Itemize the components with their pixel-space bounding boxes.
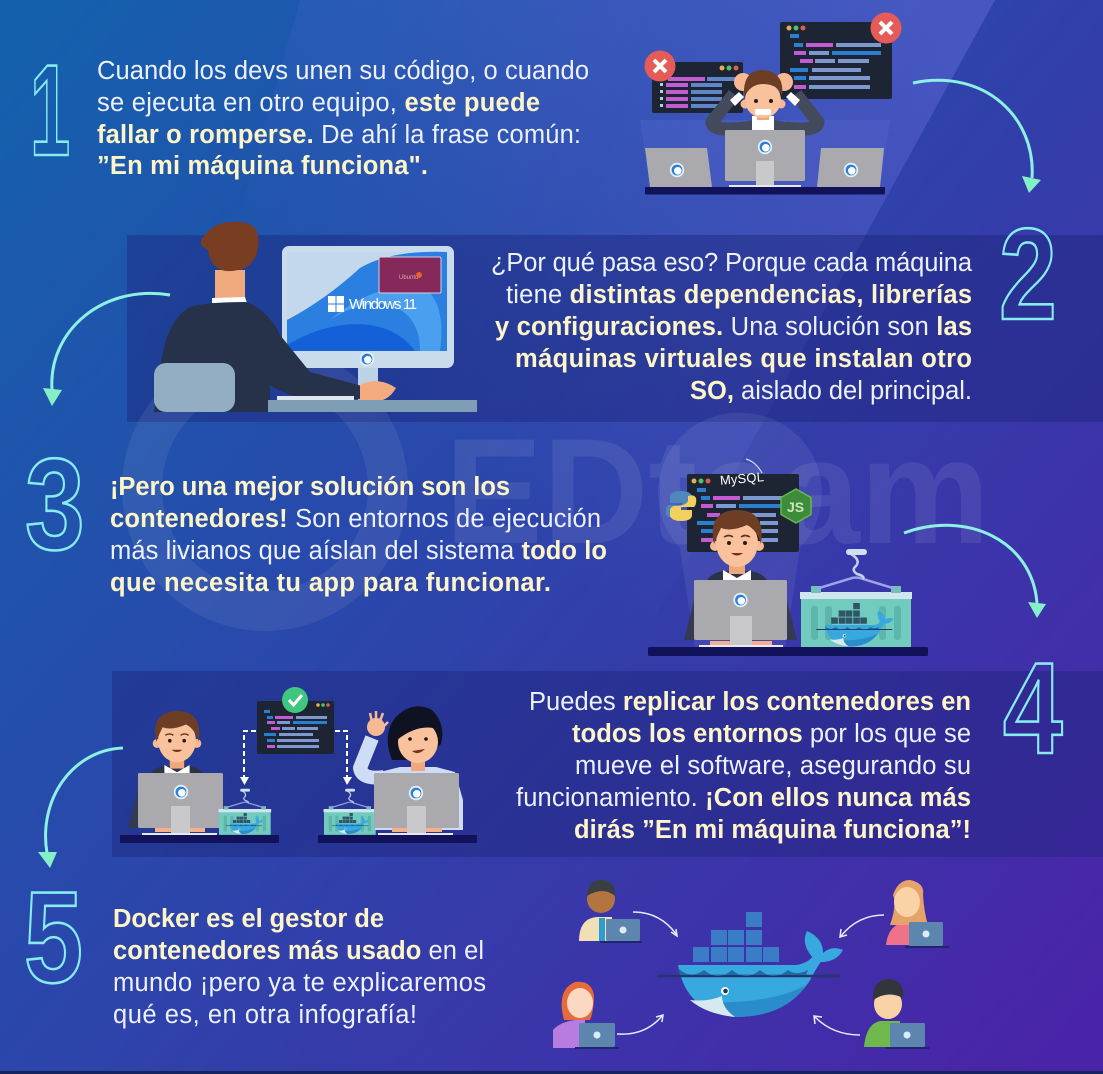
text block: step 5: mundo ¡pero ya te explicaremos bbox=[113, 969, 486, 997]
text block: step 3: que necesita tu app para funcionar. bbox=[110, 569, 551, 597]
arrow 3 to 4 bbox=[904, 525, 1046, 618]
monitor: Windows 11 bbox=[349, 296, 417, 313]
laptop bbox=[684, 580, 797, 648]
Node.js logo: JS bbox=[787, 499, 804, 515]
developer bbox=[705, 510, 769, 586]
docker container bbox=[800, 549, 912, 647]
arrow 4 to 5 bbox=[38, 748, 123, 868]
number 4: 4 bbox=[1003, 636, 1063, 781]
text block: step 2: máquinas virtuales que instalan otro bbox=[515, 345, 972, 373]
person: bottom right bbox=[864, 979, 929, 1049]
text block: step 3: contenedores! Son entornos de ejecución bbox=[110, 505, 601, 533]
text block: step 5: contenedores más usado en el bbox=[113, 937, 484, 965]
text block: step 2: y configuraciones. Una solución son las bbox=[495, 313, 972, 341]
person: top right bbox=[886, 880, 949, 948]
text block: step 4: todos los entornos por los que se bbox=[572, 720, 971, 748]
text block: step 5: qué es, en otra infografía! bbox=[113, 1001, 417, 1029]
text block: step 4: Puedes replicar los contenedores en bbox=[529, 688, 971, 716]
number 1: 1 bbox=[30, 39, 70, 183]
desk bbox=[648, 647, 928, 656]
code window left bbox=[652, 62, 743, 113]
person from behind bbox=[154, 222, 396, 412]
small arrows toward docker bbox=[617, 912, 884, 1035]
illustration: containers replicated across environments bbox=[120, 687, 477, 843]
MySQL logo bbox=[719, 459, 764, 488]
panel: step 4 band bbox=[112, 671, 1103, 857]
watermark logo bbox=[122, 345, 990, 648]
text block: step 2: SO, aislado del principal. bbox=[690, 377, 972, 405]
illustration: virtual machine on desktop bbox=[154, 222, 477, 412]
text block: step 3: ¡Pero una mejor solución son los bbox=[110, 473, 510, 501]
number 3: 3 bbox=[25, 432, 85, 577]
laptops bbox=[645, 130, 884, 188]
left laptop bbox=[128, 773, 223, 836]
text block: step 2: tiene distintas dependencias, librerías bbox=[506, 281, 972, 309]
MySQL logo: MySQL bbox=[719, 469, 764, 488]
illustration: developer with container bbox=[648, 459, 928, 656]
dashed arrows bbox=[240, 731, 352, 785]
central code window bbox=[257, 701, 334, 754]
illustration: frustrated developer bbox=[640, 12, 902, 194]
right container bbox=[324, 789, 376, 835]
panel: step 2 band bbox=[127, 235, 1103, 422]
text block: step 5 bbox=[113, 905, 486, 1029]
code window bbox=[687, 474, 799, 552]
docker whale logo bbox=[657, 912, 843, 1017]
text block: step 4: funcionamiento. ¡Con ellos nunca más bbox=[516, 784, 971, 812]
code window right bbox=[780, 22, 892, 99]
text block: step 4 bbox=[516, 688, 971, 844]
text block: step 1: fallar o romperse. De ahí la frase común: bbox=[97, 121, 581, 149]
watermark logo: EDteam bbox=[445, 407, 990, 575]
text block: step 3: más livianos que aíslan del sistema todo lo bbox=[110, 537, 607, 565]
text block: step 5: Docker es el gestor de bbox=[113, 905, 384, 933]
number 5: 5 bbox=[24, 866, 83, 1011]
right laptop bbox=[374, 773, 459, 836]
person: top left bbox=[579, 880, 642, 943]
desk bbox=[268, 400, 477, 412]
left container bbox=[219, 789, 271, 835]
error badges bbox=[644, 12, 902, 82]
text block: step 2: ¿Por qué pasa eso? Porque cada máquina bbox=[491, 249, 973, 277]
arrow 2 to 3 bbox=[43, 293, 170, 406]
desk bbox=[645, 187, 885, 194]
woman waving bbox=[360, 706, 463, 830]
text block: step 1 bbox=[97, 57, 589, 180]
text block: step 4: dirás ”En mi máquina funciona”! bbox=[574, 816, 971, 844]
number 2: 2 bbox=[999, 201, 1057, 347]
Python logo bbox=[666, 491, 696, 521]
text block: step 2 bbox=[491, 249, 973, 405]
monitor: Ubuntu bbox=[399, 275, 418, 281]
Node.js logo bbox=[781, 489, 811, 523]
arrow 1 to 2 bbox=[913, 80, 1041, 193]
text block: step 1: se ejecuta en otro equipo, este puede bbox=[97, 89, 540, 117]
text block: step 1: Cuando los devs unen su código, o cuando bbox=[97, 57, 589, 85]
text block: step 3 bbox=[110, 473, 607, 597]
check badge bbox=[282, 687, 308, 713]
text block: step 4: mueve el software, asegurando su bbox=[575, 752, 971, 780]
stressed person bbox=[712, 70, 818, 132]
text block: step 1: ”En mi máquina funciona". bbox=[97, 152, 428, 180]
left developer bbox=[148, 711, 206, 779]
desks bbox=[120, 835, 477, 843]
person: bottom left bbox=[553, 982, 619, 1049]
monitor bbox=[282, 246, 454, 401]
